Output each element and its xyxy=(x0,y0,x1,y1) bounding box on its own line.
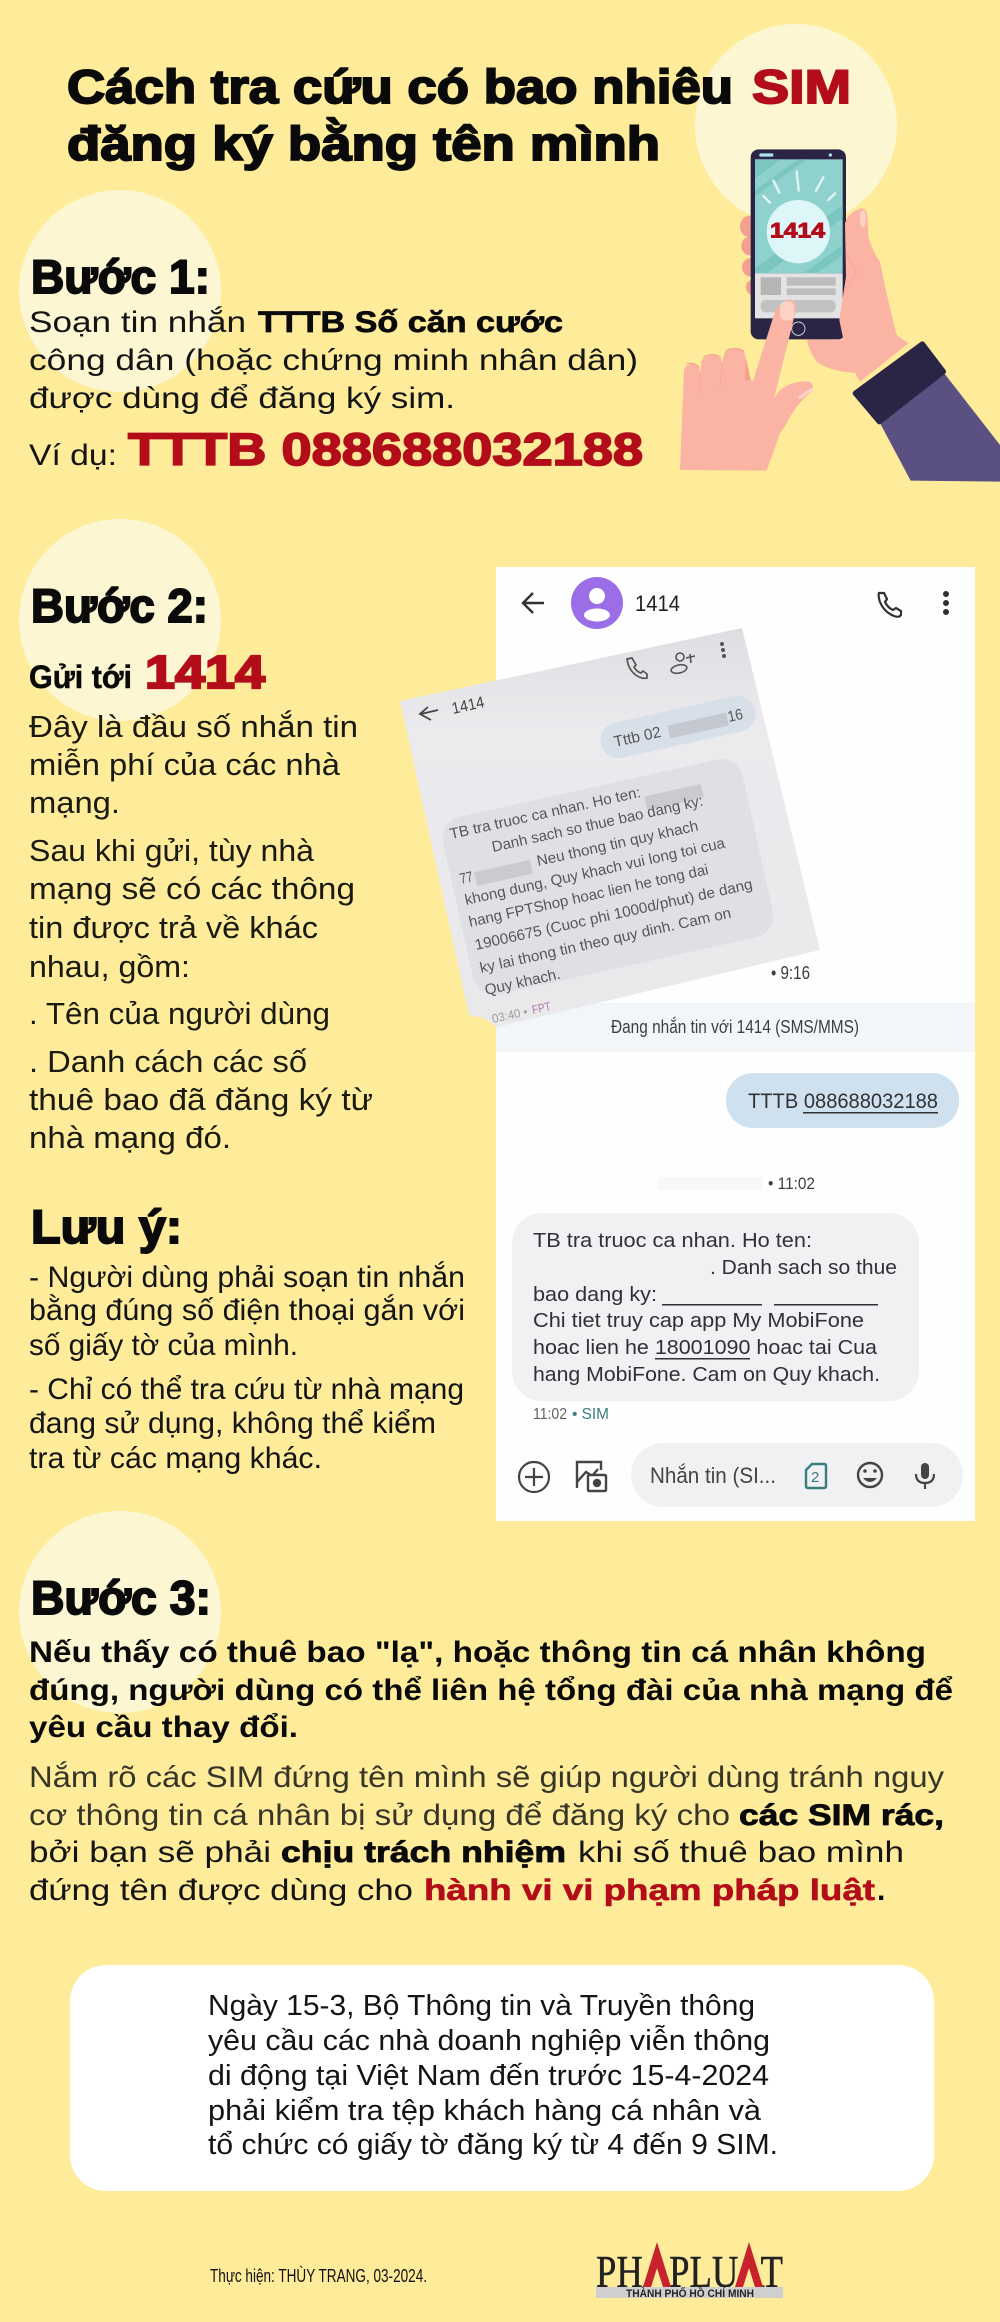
step 3 heading: Bước 3: xyxy=(31,1571,211,1624)
step 1 instructions: công dân (hoặc chứng minh nhân dân) xyxy=(29,344,638,377)
sent bubble: TTTB 088688032188 xyxy=(748,1090,938,1113)
sent text: Tttb 02 xyxy=(612,724,663,751)
logo: Pháp Luật: THÀNH PHỐ HỒ CHÍ MINH xyxy=(626,2286,754,2300)
step 2 description: miễn phí của các nhà xyxy=(29,747,341,782)
received text: khong dung, Quy khach vui long toi cua xyxy=(463,835,727,909)
sent bubble xyxy=(597,692,759,762)
note text: tra từ các mạng khác. xyxy=(29,1442,322,1475)
header title: 1414 xyxy=(450,694,486,718)
received text xyxy=(448,784,754,999)
step 2 description: mạng. xyxy=(29,785,120,820)
step 3 bold text: đúng, người dùng có thể liên hệ tổng đài của nhà mạng để xyxy=(29,1674,953,1707)
title xyxy=(67,60,851,170)
step 3 explanation: khi số thuê bao mình xyxy=(578,1836,904,1869)
note text: - Người dùng phải soạn tin nhắn xyxy=(29,1261,465,1294)
message input: Nhắn tin (SI... xyxy=(650,1463,776,1488)
message meta: 03:40 • xyxy=(491,1004,529,1026)
received bubble: Chi tiet truy cap app My MobiFone xyxy=(533,1309,864,1332)
received bubble: TB tra truoc ca nhan. Ho ten: xyxy=(533,1229,812,1252)
received text: Neu thong tin quy khach xyxy=(535,818,700,870)
received text: ky lai thong tin theo quy dinh. Cam on xyxy=(478,905,733,977)
step 2 description: tin được trả về khác xyxy=(29,910,318,945)
title: đăng ký bằng tên mình xyxy=(67,117,660,170)
icon: phone body: 1414 xyxy=(770,219,825,242)
decorative circle: step 2 xyxy=(19,519,221,721)
sent text xyxy=(612,706,745,751)
time stamp xyxy=(657,1174,815,1193)
step 3 bold text: yêu cầu thay đổi. xyxy=(29,1711,298,1744)
step 1 instructions: TTTB Số căn cước xyxy=(258,306,563,339)
callout: policy note: Ngày 15-3, Bộ Thông tin và Truyền thông xyxy=(208,1990,755,2022)
step 2 description: Đây là đầu số nhắn tin xyxy=(29,709,358,744)
step 2 heading: Bước 2: xyxy=(31,579,208,632)
sent text: 16 xyxy=(726,706,745,726)
icon: sleeve xyxy=(878,370,1000,482)
message meta xyxy=(491,999,553,1026)
received text: Danh sach so thue bao dang ky: xyxy=(490,793,705,856)
received bubble: hoac lien he 18001090 hoac tai Cua xyxy=(533,1336,878,1359)
time stamp: • 11:02 xyxy=(768,1174,815,1193)
icon: gallery camera xyxy=(577,1462,606,1491)
message meta xyxy=(533,1406,609,1423)
icon: SIM 2: 2 xyxy=(811,1469,819,1486)
step 1 example: Ví dụ: xyxy=(29,439,117,472)
title: Cách tra cứu có bao nhiêu xyxy=(67,60,733,113)
date stamp: • 9:16 xyxy=(771,963,810,983)
note heading: Lưu ý: xyxy=(31,1200,182,1253)
step 1 instructions xyxy=(29,306,638,415)
icon: fingers behind phone xyxy=(740,216,761,295)
received bubble xyxy=(512,1213,919,1401)
callout: policy note: tổ chức có giấy tờ đăng ký từ 4 đến 9 SIM. xyxy=(208,2129,778,2161)
step 2 description: . Danh cách các số xyxy=(29,1044,307,1079)
step 2 description: mạng sẽ có các thông xyxy=(29,871,355,906)
step 3 explanation: cơ thông tin cá nhân bị sử dụng để đăng ký cho xyxy=(29,1799,730,1832)
callout: policy note: di động tại Việt Nam đến trước 15-4-2024 xyxy=(208,2060,769,2092)
step 1 example xyxy=(29,424,643,475)
icon: add xyxy=(519,1462,549,1492)
icon: call xyxy=(627,658,647,678)
icon: back arrow xyxy=(523,593,544,613)
icon: menu dots xyxy=(943,591,949,615)
messaging status band xyxy=(496,1003,975,1052)
decorative circle: title xyxy=(695,24,897,226)
step 2 description: . Tên của người dùng xyxy=(29,996,330,1031)
message meta: FPT xyxy=(531,999,553,1017)
icon: menu dots xyxy=(720,642,726,658)
sent bubble xyxy=(726,1073,959,1128)
icon: add person xyxy=(670,653,695,675)
step 3 bold text xyxy=(29,1636,953,1744)
message input xyxy=(631,1443,963,1507)
step 2 description xyxy=(29,709,373,1155)
icon: watch cuff xyxy=(855,344,943,422)
received text: 19006675 (Cuoc phi 1000d/phut) de dang xyxy=(473,876,754,954)
step 3 explanation: các SIM rác, xyxy=(739,1799,944,1832)
step 1 example: TTTB 088688032188 xyxy=(128,424,643,475)
note text: - Chỉ có thể tra cứu từ nhà mạng xyxy=(29,1373,464,1406)
received text: Quy khach. xyxy=(483,966,562,999)
step 3 explanation: Nắm rõ các SIM đứng tên mình sẽ giúp người dùng tránh nguy xyxy=(29,1761,944,1794)
step 2 send to: 1414 xyxy=(145,646,265,698)
received bubble: bao dang ky: xyxy=(533,1283,657,1306)
step 2 description: nhà mạng đó. xyxy=(29,1120,231,1155)
icon: contact avatar xyxy=(571,577,623,629)
step 2 description: Sau khi gửi, tùy nhà xyxy=(29,833,315,868)
note text: đang sử dụng, không thể kiểm xyxy=(29,1407,436,1440)
icon: holding hand xyxy=(807,208,908,382)
icon: microphone xyxy=(916,1463,934,1489)
received bubble: hang MobiFone. Cam on Quy khach. xyxy=(533,1363,880,1386)
icon: back arrow xyxy=(420,707,438,720)
received text: hang FPTShop hoac lien he tong dai xyxy=(467,861,710,931)
icon: phone body xyxy=(751,149,846,339)
step 1 instructions: Soạn tin nhắn xyxy=(29,306,246,339)
received bubble: . Danh sach so thue xyxy=(710,1256,897,1279)
icon: emoji xyxy=(858,1463,882,1487)
step 3 explanation: chịu trách nhiệm xyxy=(281,1836,566,1869)
step 3 explanation: đứng tên được dùng cho xyxy=(29,1874,413,1907)
icon: SIM 2 xyxy=(806,1464,826,1488)
decorative circle: step 3 xyxy=(19,1511,221,1713)
step 3 explanation: hành vi vi phạm pháp luật xyxy=(424,1874,875,1907)
note text xyxy=(29,1261,465,1475)
message meta: 11:02 xyxy=(533,1406,567,1423)
received text: 77 xyxy=(458,868,475,888)
step 3 explanation xyxy=(29,1761,944,1907)
contact name: 1414 xyxy=(635,591,680,616)
decorative circle: step 1 xyxy=(19,190,221,392)
panel: phone screenshot MobiFone xyxy=(496,567,975,1521)
step 2 description: thuê bao đã đăng ký từ xyxy=(29,1082,373,1117)
received bubble xyxy=(438,755,778,999)
step 1 heading: Bước 1: xyxy=(31,250,210,303)
step 2 send to xyxy=(29,646,265,698)
note text: bằng đúng số điện thoại gắn với xyxy=(29,1294,465,1327)
step 3 explanation: . xyxy=(877,1874,885,1907)
callout: policy note xyxy=(70,1965,934,2191)
icon: call xyxy=(879,593,901,617)
step 2 send to: Gửi tới xyxy=(29,659,132,695)
step 3 bold text: Nếu thấy có thuê bao "lạ", hoặc thông tin cá nhân không xyxy=(29,1636,926,1669)
panel: tilted FPT screenshot xyxy=(400,628,820,1027)
credit: Thực hiện: THÙY TRANG, 03-2024. xyxy=(210,2265,427,2286)
message meta: • SIM xyxy=(572,1406,609,1423)
received text: TB tra truoc ca nhan. Ho ten: xyxy=(448,784,642,843)
illustration: hand holding phone showing 1414 xyxy=(680,149,1000,482)
icon: pointing hand xyxy=(680,299,813,471)
title: SIM xyxy=(752,60,851,113)
step 2 description: nhau, gồm: xyxy=(29,949,190,984)
logo: Pháp Luật: PHAPLUAT xyxy=(596,2246,783,2297)
callout: policy note: yêu cầu các nhà doanh nghiệp viễn thông xyxy=(208,2024,770,2057)
step 1 instructions: được dùng để đăng ký sim. xyxy=(29,382,455,415)
step 3 explanation: bởi bạn sẽ phải xyxy=(29,1836,271,1869)
callout: policy note: phải kiểm tra tệp khách hàng cá nhân và xyxy=(208,2095,762,2127)
note text: số giấy tờ của mình. xyxy=(29,1329,298,1362)
messaging status band: Đang nhắn tin với 1414 (SMS/MMS) xyxy=(611,1016,859,1037)
